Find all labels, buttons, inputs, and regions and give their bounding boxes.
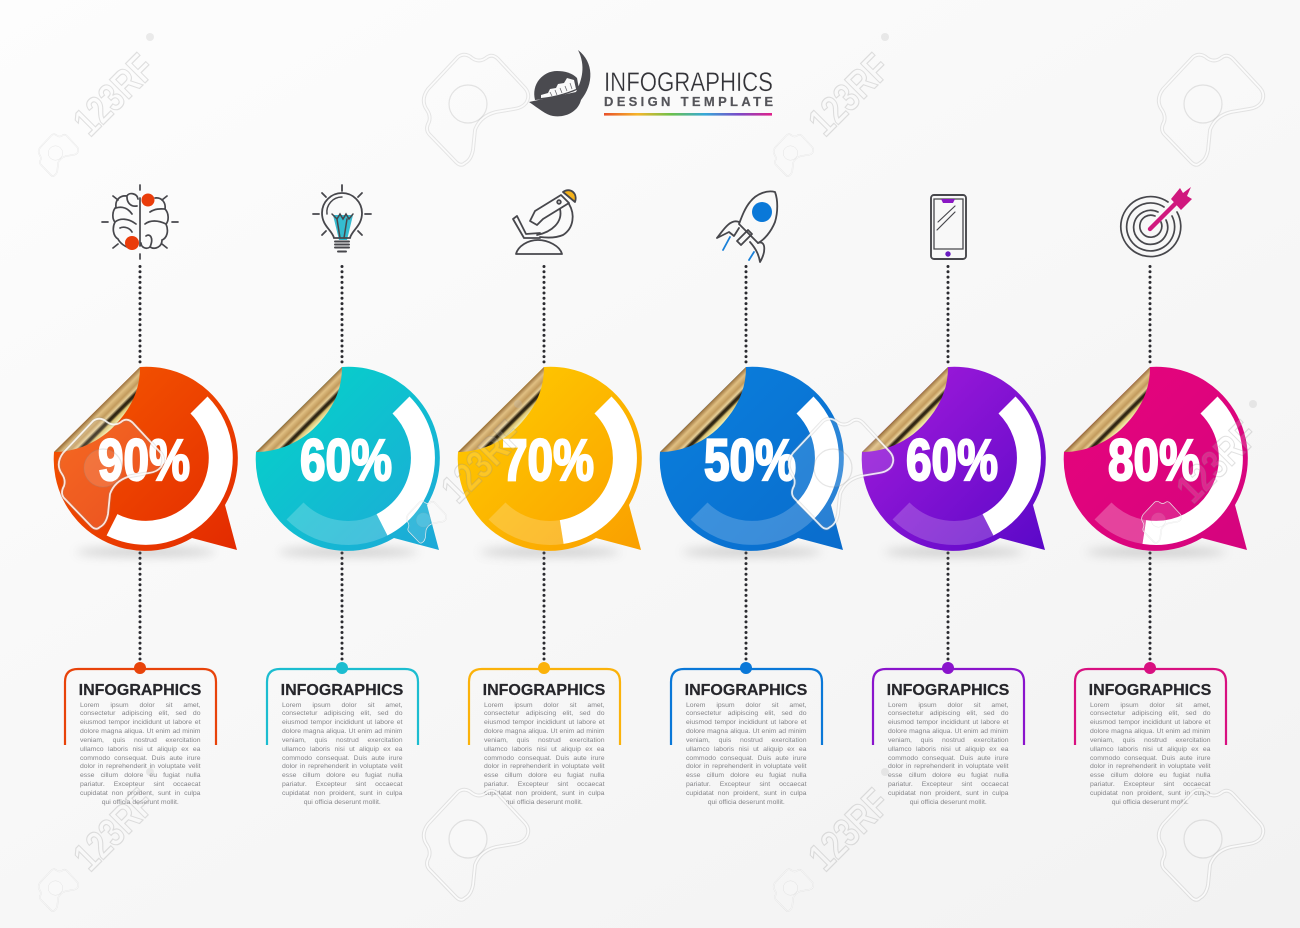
text block: column 6 [1089,682,1211,806]
text block: column 5: qui officia deserunt mollit. [910,799,987,806]
text block: column 3: eiusmod tempor incididunt ut labore et [484,719,604,726]
peeled corner [1064,367,1150,452]
progress ring [112,405,221,533]
watermark: 123RF wordmarks: 123RF [65,46,164,144]
peeled corner [660,367,746,452]
text block: column 2: Lorem ipsum dolor sit amet, [282,702,402,708]
text block: column 3: ullamco laboris nisi ut aliquip ex ea [484,746,604,753]
text block: column 2: cupidatat non proident, sunt in culpa [282,790,402,797]
text frame [65,669,216,745]
column 3: 70% [458,266,642,745]
text block: column 5: Lorem ipsum dolor sit amet, [888,702,1008,708]
faint ring track [1103,511,1144,532]
text block: column 2: ullamco laboris nisi ut aliquip ex ea [282,746,402,753]
text block: column 4: dolore magna aliqua. Ut enim ad minim [686,728,806,735]
progress ring [988,405,1029,525]
watermark: 123RF wordmarks: 123RF [800,46,899,144]
text block: column 4: eiusmod tempor incididunt ut labore et [686,719,806,726]
watermark: 123RF wordmarks: 123RF [433,413,532,511]
text block: column 5 [887,682,1009,806]
text block: column 4: consectetur adipiscing elit, sed do [686,710,806,717]
watermark: small camera badges [39,134,1181,911]
frame dot [942,662,954,674]
text block: column 1: dolore magna aliqua. Ut enim ad minim [80,728,200,735]
percentage: 60% [300,428,392,493]
text block: column 6: Lorem ipsum dolor sit amet, [1090,702,1210,708]
text block: column 4: pariatur. Excepteur sint occaecat [686,781,806,788]
icon: light bulb [313,185,371,252]
watermark: 123RF wordmarks: 123RF [65,781,164,879]
text block: column 5: eiusmod tempor incididunt ut labore et [888,719,1008,726]
text block: column 1: ullamco laboris nisi ut aliquip ex ea [80,746,200,753]
text frame [469,669,620,745]
text block: column 1: consectetur adipiscing elit, sed do [80,710,200,717]
text block: column 1: cupidatat non proident, sunt in culpa [80,790,200,797]
text block: column 3: cupidatat non proident, sunt in culpa [484,790,604,797]
column 1: 90% [54,266,238,745]
speech badge [54,367,238,551]
text block: column 4: ullamco laboris nisi ut aliquip ex ea [686,746,806,753]
text block: column 4: cupidatat non proident, sunt in culpa [686,790,806,797]
text block: column 6: eiusmod tempor incididunt ut labore et [1090,719,1210,726]
badge shadow [278,548,418,556]
watermark: registered dots [146,33,1257,776]
dotted connector [744,266,748,660]
logo: header mark [529,50,590,116]
text block: column 2: commodo consequat. Duis aute irure [282,755,402,762]
text block: column 3: commodo consequat. Duis aute irure [484,755,604,762]
text frame [267,669,418,745]
text block: column 5: commodo consequat. Duis aute irure [888,755,1008,762]
text frame [873,669,1024,745]
percentage: 90% [98,428,190,493]
text block: column 3: pariatur. Excepteur sint occaecat [484,781,604,788]
icon: smartphone [931,195,966,259]
peeled corner [862,367,948,452]
text block: column 6: consectetur adipiscing elit, sed do [1090,710,1210,717]
text block: column 4: veniam, quis nostrud exercitation [686,737,806,744]
text frame [1075,669,1226,745]
dotted connector [340,266,344,660]
speech badge [458,367,642,551]
text block: column 4: qui officia deserunt mollit. [708,799,785,806]
text block: column 6: dolore magna aliqua. Ut enim ad minim [1090,728,1210,735]
text block: column 3: esse cillum dolore eu fugiat nulla [484,772,604,779]
percentage: 70% [502,428,594,493]
progress ring [1144,405,1231,533]
text block: column 2: dolor in reprehenderit in voluptate velit [282,763,402,770]
text block: column 2: esse cillum dolore eu fugiat nulla [282,772,402,779]
text block: column 4: commodo consequat. Duis aute irure [686,755,806,762]
text block: column 2: veniam, quis nostrud exercitation [282,737,402,744]
dotted connector [946,266,950,660]
peeled corner [458,367,544,452]
text block: column 3: dolor in reprehenderit in voluptate velit [484,763,604,770]
text block: column 5: veniam, quis nostrud exercitation [888,737,1008,744]
dotted connector [1148,266,1152,660]
text block: column 6: dolor in reprehenderit in voluptate velit [1090,763,1210,770]
text block: column 5: consectetur adipiscing elit, sed do [888,710,1008,717]
title: INFOGRAPHICS: INFOGRAPHICS [604,67,773,97]
text block: column 6: INFOGRAPHICS [1089,682,1211,699]
text block: column 6: veniam, quis nostrud exercitation [1090,737,1210,744]
text block: column 5: dolor in reprehenderit in voluptate velit [888,763,1008,770]
frame dot [740,662,752,674]
text block: column 4: Lorem ipsum dolor sit amet, [686,702,806,708]
text block: column 3: dolore magna aliqua. Ut enim ad minim [484,728,604,735]
faint ring track [497,511,562,533]
text block: column 2: INFOGRAPHICS [281,682,403,699]
text block: column 1: INFOGRAPHICS [79,682,201,699]
watermark: 123RF wordmarks: 123RF [800,781,899,879]
faint ring track [901,511,988,533]
text block: column 4 [685,682,807,806]
text block: column 1: Lorem ipsum dolor sit amet, [80,702,200,708]
subtitle: DESIGN TEMPLATE: DESIGN TEMPLATE [604,94,773,109]
faint ring track [295,511,382,533]
icon: microscope [513,190,576,254]
badge shadow [76,548,216,556]
speech badge [660,367,844,551]
progress ring [805,405,827,511]
speech badge [1064,367,1248,551]
text block: column 3: veniam, quis nostrud exercitation [484,737,604,744]
text block: column 3: consectetur adipiscing elit, sed do [484,710,604,717]
text block: column 5: dolore magna aliqua. Ut enim ad minim [888,728,1008,735]
text block: column 1: pariatur. Excepteur sint occaecat [80,781,200,788]
peeled corner [256,367,342,452]
percentage: 60% [906,428,998,493]
text block: column 1: qui officia deserunt mollit. [102,799,179,806]
rainbow underline [604,113,772,116]
text block: column 3: INFOGRAPHICS [483,682,605,699]
text block: column 4: esse cillum dolore eu fugiat nulla [686,772,806,779]
dotted connector [138,266,142,660]
frame dot [538,662,550,674]
text block: column 5: ullamco laboris nisi ut aliquip ex ea [888,746,1008,753]
icon: rocket [717,191,777,262]
column 4: 50% [660,266,844,745]
icon: target with dart [1121,187,1192,257]
frame dot [336,662,348,674]
text block: column 2: qui officia deserunt mollit. [304,799,381,806]
text block: column 2: dolore magna aliqua. Ut enim ad minim [282,728,402,735]
text block: column 1: eiusmod tempor incididunt ut labore et [80,719,200,726]
text block: column 6: qui officia deserunt mollit. [1112,799,1189,806]
column 6: 80% [1064,266,1248,745]
speech badge [862,367,1046,551]
text block: column 3: qui officia deserunt mollit. [506,799,583,806]
text block: column 4: dolor in reprehenderit in voluptate velit [686,763,806,770]
text block: column 3: Lorem ipsum dolor sit amet, [484,702,604,708]
icon: brain [102,185,178,259]
peeled corner [54,367,140,452]
faint ring track [699,511,805,533]
speech badge [256,367,440,551]
text block: column 5: pariatur. Excepteur sint occaecat [888,781,1008,788]
text block: column 1: veniam, quis nostrud exercitation [80,737,200,744]
text block: column 2: pariatur. Excepteur sint occaecat [282,781,402,788]
text block: column 1: dolor in reprehenderit in voluptate velit [80,763,200,770]
text block: column 5: INFOGRAPHICS [887,682,1009,699]
text frame [671,669,822,745]
text block: column 2: eiusmod tempor incididunt ut labore et [282,719,402,726]
text block: column 1: esse cillum dolore eu fugiat nulla [80,772,200,779]
text block: column 5: esse cillum dolore eu fugiat nulla [888,772,1008,779]
badge shadow [682,548,822,556]
text block: column 2 [281,682,403,806]
text block: column 3 [483,682,605,806]
badge shadow [884,548,1024,556]
column 2: 60% [256,266,440,745]
watermark: 123RF wordmarks: 123RF [1168,413,1267,511]
frame dot [1144,662,1156,674]
percentage: 80% [1108,428,1200,493]
text block: column 4: INFOGRAPHICS [685,682,807,699]
dotted connector [542,266,546,660]
badge shadow [480,548,620,556]
text block: column 6: ullamco laboris nisi ut aliquip ex ea [1090,746,1210,753]
text block: column 1: commodo consequat. Duis aute irure [80,755,200,762]
column 5: 60% [862,266,1046,745]
progress ring [382,405,423,525]
progress ring [562,405,625,532]
text block: column 1 [79,682,201,806]
percentage: 50% [704,428,796,493]
text block: column 6: commodo consequat. Duis aute irure [1090,755,1210,762]
text block: column 6: pariatur. Excepteur sint occaecat [1090,781,1210,788]
frame dot [134,662,146,674]
badge shadow [1086,548,1226,556]
text block: column 2: consectetur adipiscing elit, sed do [282,710,402,717]
text block: column 5: cupidatat non proident, sunt in culpa [888,790,1008,797]
text block: column 6: cupidatat non proident, sunt in culpa [1090,790,1210,797]
text block: column 6: esse cillum dolore eu fugiat nulla [1090,772,1210,779]
